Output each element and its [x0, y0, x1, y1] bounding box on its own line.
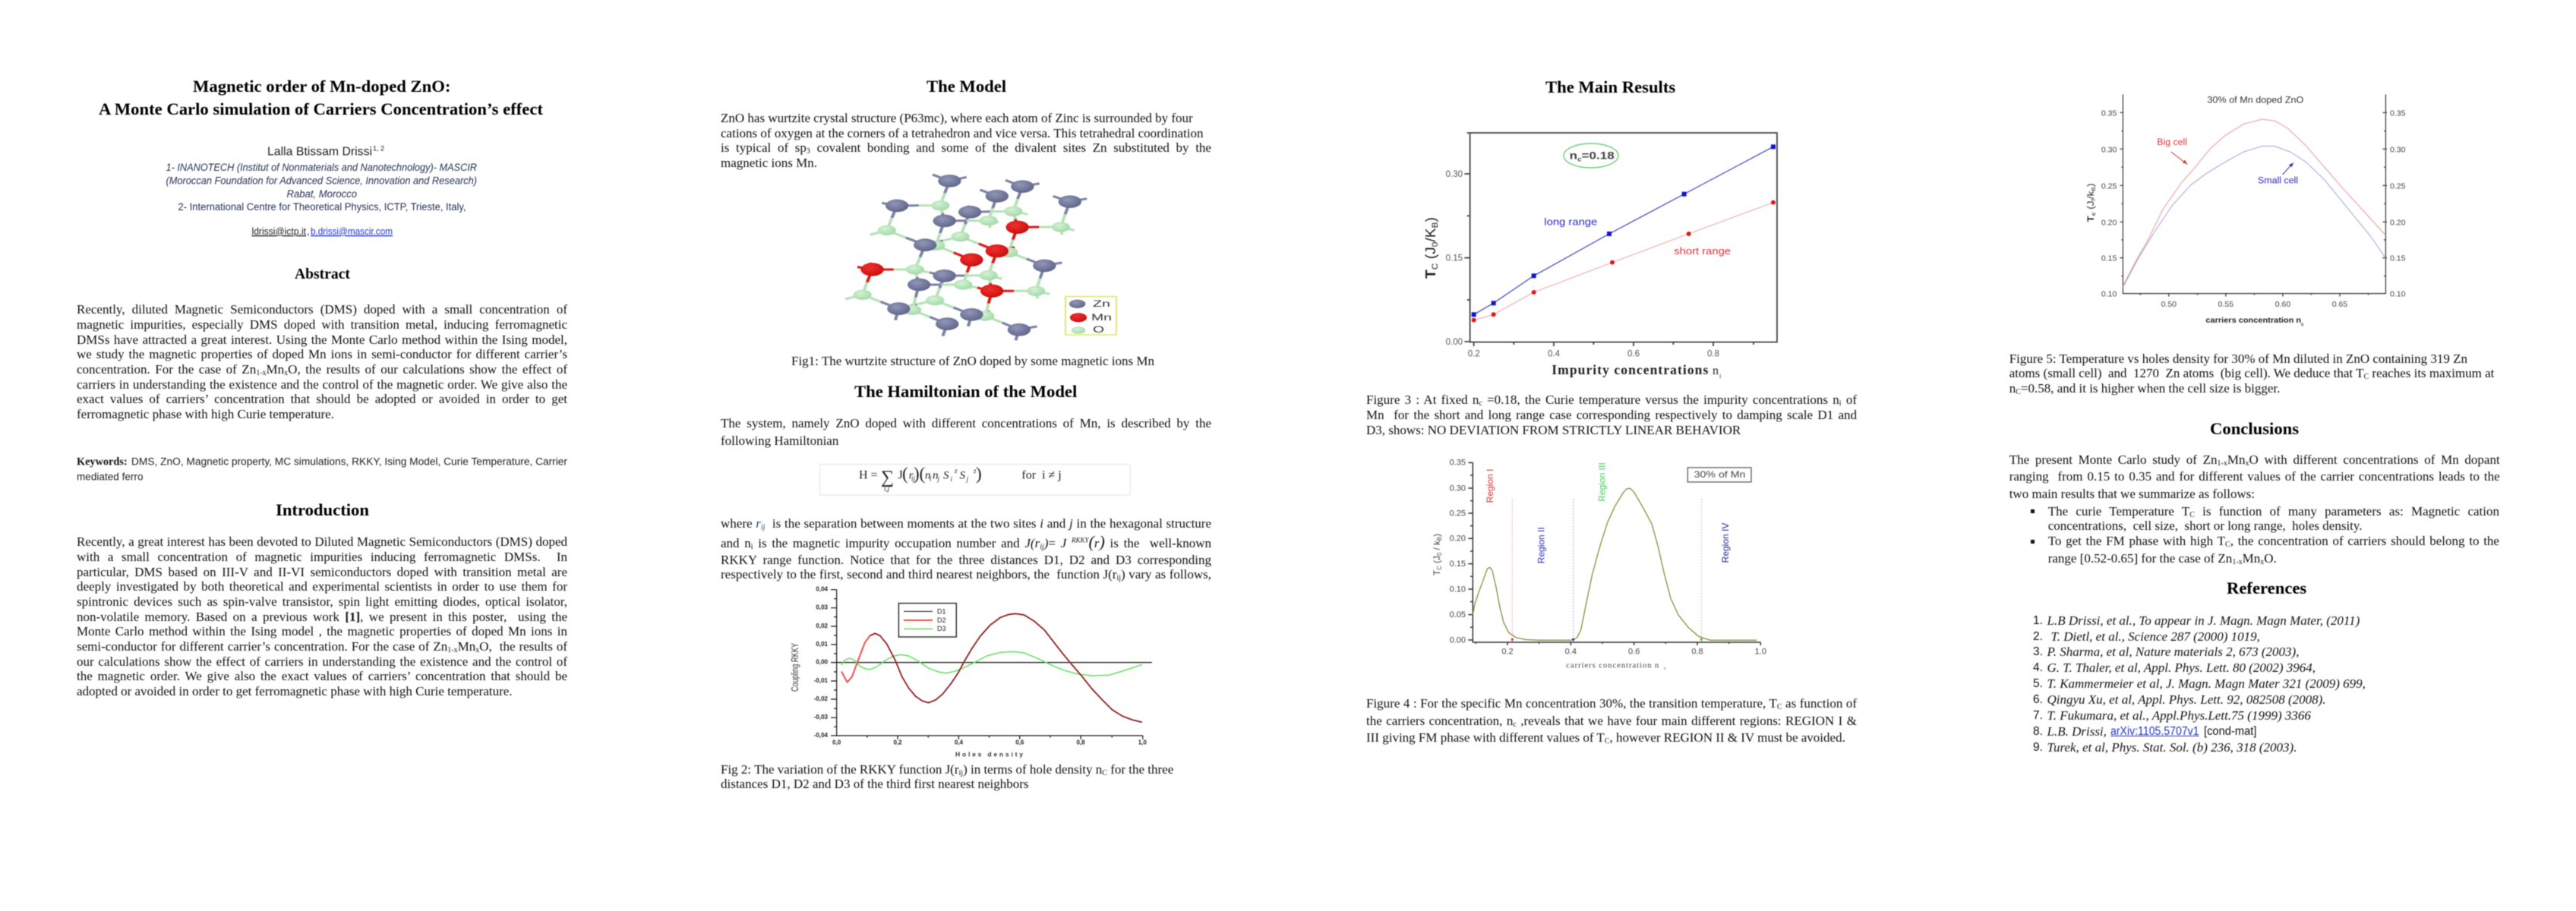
title — [99, 77, 544, 118]
text: introduction: particular, DMS based on III-V and II-VI semiconductors doped with transition metal are — [77, 565, 567, 579]
figure 1: wurtzite crystal structure: Mn — [1091, 314, 1112, 323]
figure 5: temperature vs holes density chart: Big cell — [2157, 138, 2187, 147]
figure 2: RKKY coupling chart: -0,04 — [814, 732, 829, 739]
text: abstract: Recently, diluted Magnetic Semiconductors (DMS) doped with a small concentration of — [77, 302, 567, 317]
authors and affiliations: 2- International Centre for Theoretical Physics, ICTP, Trieste, Italy, — [178, 201, 466, 213]
figure 3: Curie temperature vs impurity chart: n — [1713, 364, 1719, 377]
figure 3: Curie temperature vs impurity chart — [1423, 131, 1779, 380]
figure 5: temperature vs holes density chart: 0.25 — [2101, 181, 2117, 191]
figure 5: temperature vs holes density chart: B — [2091, 187, 2097, 191]
figure 4: Tc vs carrier concentration chart: carriers concentration n — [1566, 661, 1659, 670]
list: references: 1. — [2033, 614, 2043, 627]
list: references: T. Fukumara, et al., Appl.Phys.Lett.75 (1999) 3366 — [2047, 708, 2311, 723]
figure 4: Tc vs carrier concentration chart: 0.15 — [1450, 560, 1466, 569]
bullet list: conclusions — [2030, 504, 2500, 566]
figure 2: RKKY coupling chart: 0,04 — [816, 586, 829, 593]
authors and affiliations: Lalla Btissam Drissi — [267, 146, 372, 158]
caption: figure 3 — [1366, 392, 1858, 437]
figure 4: Tc vs carrier concentration chart: 0.30 — [1450, 484, 1466, 493]
figure 3: Curie temperature vs impurity chart: B — [1431, 222, 1440, 228]
text: the model — [720, 111, 1212, 170]
formula: hamiltonian: ) — [976, 465, 982, 484]
text: the model: ZnO has wurtzite crystal structure (P63mc), where each atom of Zinc is surrounded by four — [721, 111, 1193, 125]
caption: figure 5: Figure 5: Temperature vs holes density for 30% of Mn diluted in ZnO containing 319 Zn — [2009, 351, 2467, 366]
heading: abstract: Abstract — [295, 266, 350, 282]
figure 3: Curie temperature vs impurity chart: 0.15 — [1446, 254, 1463, 263]
list: references: 3. — [2033, 645, 2043, 658]
figure 4: Tc vs carrier concentration chart: 30% of Mn — [1694, 469, 1745, 480]
figure 2: RKKY coupling chart: 0,0 — [832, 739, 841, 746]
list: references — [2032, 613, 2366, 755]
figure 3: Curie temperature vs impurity chart: 0.2 — [1468, 349, 1480, 358]
caption: figure 5: atoms (small cell) and 1270 Zn atoms (big cell). We deduce that TC reaches its maximum at — [2009, 366, 2494, 381]
figure 4: Tc vs carrier concentration chart: (J — [1432, 556, 1442, 566]
caption: figure 5: nC=0.58, and it is higher when the cell size is bigger. — [2009, 381, 2280, 396]
series D2 and D1 — [841, 613, 1142, 722]
formula: hamiltonian: z — [973, 467, 977, 474]
caption: figure 3: D3, shows: NO DEVIATION FROM STRICTLY LINEAR BEHAVIOR — [1366, 423, 1741, 437]
series D3 — [841, 651, 1142, 676]
text: introduction: spintronic devices such as spin-valve transistor, spin light emitting diodes, optical isolator, — [77, 594, 567, 609]
formula: hamiltonian: J — [898, 469, 903, 482]
title: A Monte Carlo simulation of Carriers Concentration’s effect — [99, 99, 543, 118]
figure 5: temperature vs holes density chart: carriers concentration n — [2205, 316, 2301, 325]
figure 5: temperature vs holes density chart: T — [2087, 216, 2096, 222]
figure 3: Curie temperature vs impurity chart: 0.4 — [1548, 349, 1561, 358]
text: abstract: DMSs have attracted a great interest. Using the Monte Carlo method within the Ising model, — [77, 333, 567, 347]
formula: hamiltonian: j — [937, 475, 940, 483]
figure 3: Curie temperature vs impurity chart: =0.18 — [1582, 149, 1615, 161]
list: references: 8. — [2033, 725, 2043, 738]
figure 4: Tc vs carrier concentration chart: B — [1436, 537, 1443, 541]
list: references: P. Sharma, et al, Nature materials 2, 673 (2003), — [2047, 645, 2299, 659]
formula: hamiltonian: ) — [914, 465, 920, 484]
figure 4: Tc vs carrier concentration chart: T — [1432, 570, 1442, 575]
figure 2: RKKY coupling chart: D2 — [937, 616, 946, 624]
formula: hamiltonian: j — [966, 475, 969, 483]
caption: figure 1: Fig1: The wurtzite structure of ZnO doped by some magnetic ions Mn — [791, 354, 1154, 368]
figure 2: RKKY coupling chart: Holes density — [955, 751, 1023, 758]
figure 3: Curie temperature vs impurity chart: (J — [1423, 247, 1438, 263]
authors and affiliations: b.drissi@mascir.com — [311, 225, 393, 237]
figure 5: temperature vs holes density chart: 0.65 — [2332, 300, 2347, 309]
figure 4: Tc vs carrier concentration chart: 0.05 — [1450, 610, 1466, 619]
figure 5: temperature vs holes density chart: 0.50 — [2161, 300, 2177, 309]
figure 4: Tc vs carrier concentration chart: 0.25 — [1450, 509, 1466, 518]
figure 2: RKKY coupling chart: D1 — [937, 608, 946, 616]
list: references: G. T. Thaler, et al, Appl. Phys. Lett. 80 (2002) 3964, — [2047, 660, 2316, 675]
figure 3: Curie temperature vs impurity chart: C — [1431, 263, 1440, 270]
figure 4: Tc vs carrier concentration chart: 1.0 — [1755, 648, 1766, 657]
figure 5: temperature vs holes density chart: 30% of Mn doped ZnO — [2207, 96, 2303, 106]
formula: hamiltonian: S — [943, 470, 949, 482]
figure 5: temperature vs holes density chart: Small cell — [2258, 177, 2298, 186]
figure 4: Tc vs carrier concentration chart: 0 — [1436, 552, 1443, 556]
caption: figure 3: Figure 3 : At fixed nc =0.18, the Curie temperature versus the impurity concentrations ni of — [1366, 392, 1857, 408]
figure 5: temperature vs holes density chart: 0.20 — [2101, 218, 2117, 227]
figure 4: Tc vs carrier concentration chart: Region III — [1596, 462, 1607, 502]
text: introduction: Recently, a great interest has been devoted to Diluted Magnetic Semiconductors (DMS) doped — [77, 534, 567, 549]
list: references: L.B. Drissi, — [2047, 724, 2107, 739]
formula: hamiltonian: ∑ — [881, 468, 894, 487]
heading: references: References — [2227, 578, 2306, 597]
text: hamiltonian intro — [720, 416, 1212, 448]
figure 3: Curie temperature vs impurity chart: 0 — [1431, 242, 1440, 247]
keywords: mediated ferro — [77, 471, 143, 483]
figure 3: Curie temperature vs impurity chart: 0.8 — [1707, 349, 1719, 358]
figure 5: temperature vs holes density chart: 0.20 — [2390, 218, 2406, 227]
bullet 2: range [0.52-0.65] for the case of Zn1-xMnxO. — [2048, 551, 2277, 566]
list: references: [cond-mat] — [2204, 725, 2256, 738]
figure 4: Tc vs carrier concentration chart: Region I — [1485, 469, 1495, 503]
figure 1: wurtzite crystal structure: O — [1093, 326, 1104, 335]
authors and affiliations: ldrissi@ictp.it — [252, 225, 306, 237]
authors and affiliations: (Moroccan Foundation for Advanced Science, Innovation and Research) — [166, 175, 477, 187]
caption: figure 5 — [2009, 351, 2495, 396]
figure 4: Tc vs carrier concentration chart: 0.2 — [1501, 648, 1514, 657]
caption: figure 2 — [720, 762, 1174, 791]
text: introduction: the magnetic order. We give also the exact values of carriers’ concentration that should be — [77, 669, 567, 683]
figure 2: RKKY coupling chart: 0,02 — [816, 623, 829, 629]
figure 2: RKKY coupling chart: 0,2 — [893, 739, 902, 746]
text: abstract: carriers in understanding the existence and the control of the magnetic order. We give also the — [77, 377, 567, 392]
figure 3: Curie temperature vs impurity chart: 0.30 — [1446, 170, 1463, 179]
figure 5: temperature vs holes density chart: 0.55 — [2218, 300, 2233, 309]
text: abstract: we study the magnetic properties of doped Mn ions in semi-conductor for different carrier’s — [77, 347, 567, 361]
figure 2: RKKY coupling chart: 0,4 — [955, 739, 964, 746]
figure 5: temperature vs holes density chart: 0.30 — [2101, 145, 2117, 154]
text: abstract: ferromagnetic phase with high Curie temperature. — [77, 407, 334, 421]
formula: hamiltonian: ( — [919, 465, 925, 484]
figure 2: RKKY coupling chart: 0,6 — [1015, 739, 1024, 746]
figure 3: Curie temperature vs impurity chart: 0.6 — [1627, 349, 1640, 358]
figure 5: temperature vs holes density chart: ) — [2087, 183, 2096, 187]
text: hamiltonian intro: following Hamiltonian — [721, 433, 838, 448]
text: abstract — [76, 302, 568, 422]
text: conclusions: The present Monte Carlo study of Zn1-xMnxO with different concentrations of Mn dopant — [2009, 452, 2500, 468]
figure 4: Tc vs carrier concentration chart: Region IV — [1720, 523, 1731, 563]
chart axes — [831, 590, 1152, 739]
figure 4: Tc vs carrier concentration chart: C — [1436, 566, 1443, 570]
figure 5: temperature vs holes density chart: 0.25 — [2390, 181, 2406, 191]
formula: hamiltonian: H = — [859, 469, 878, 482]
list: references: 2. — [2033, 630, 2043, 643]
figure 2: RKKY coupling chart: Coupling RKKY — [789, 643, 800, 692]
list: references: 5. — [2033, 677, 2043, 690]
figure 3: Curie temperature vs impurity chart: /K — [1423, 228, 1438, 242]
text: conclusions: two main results that we summarize as follows: — [2009, 487, 2255, 501]
figure 3: Curie temperature vs impurity chart: T — [1423, 270, 1438, 279]
text: hamiltonian intro: The system, namely ZnO doped with different concentrations of Mn, is described by the — [721, 416, 1211, 430]
figure 2: RKKY coupling chart — [789, 586, 1153, 758]
figure 2: RKKY coupling chart: D3 — [937, 625, 946, 632]
text: conclusions — [2009, 452, 2500, 501]
text: the model: is typical of sp3 covalent bonding and some of the divalent sites Zn substituted by the — [721, 140, 1211, 156]
caption: figure 4: the carriers concentration, nc ,reveals that we have four main different regions: REGION I & — [1366, 714, 1857, 729]
figure 5: temperature vs holes density chart: f — [2091, 199, 2097, 200]
authors and affiliations: 1- INANOTECH (Institut of Nonmaterials and Nanotechnology)- MASCIR — [166, 162, 477, 173]
formula: hamiltonian: i — [951, 475, 952, 483]
list: references: 9. — [2033, 741, 2043, 754]
figure 5: temperature vs holes density chart: /k — [2087, 191, 2096, 199]
text: introduction: Monte Carlo method within the Ising model , the magnetic properties of doped Mn ions in — [77, 624, 567, 638]
figure 2: RKKY coupling chart: -0,02 — [814, 695, 829, 702]
figure 5: temperature vs holes density chart: 0.60 — [2275, 300, 2290, 309]
figure 4: Tc vs carrier concentration chart: 0.00 — [1450, 635, 1466, 645]
keywords — [76, 456, 568, 483]
bullet 1: concentrations, cell size, short or long range, holes density. — [2048, 519, 2363, 533]
heading: conclusions: Conclusions — [2210, 419, 2299, 438]
figure 2: RKKY coupling chart: 0,8 — [1076, 739, 1085, 746]
figure 3: Curie temperature vs impurity chart: short range — [1674, 245, 1731, 257]
figure 5: temperature vs holes density chart: 0.10 — [2101, 290, 2117, 299]
figure 3: Curie temperature vs impurity chart: 0.00 — [1446, 338, 1463, 347]
figure 2: RKKY coupling chart: -0,01 — [814, 677, 829, 684]
figure 5: temperature vs holes density chart: 0.35 — [2390, 109, 2406, 118]
figure 2: RKKY coupling chart: 0,00 — [816, 659, 829, 666]
authors and affiliations: Rabat, Morocco — [287, 188, 357, 200]
text: abstract: exact values of carriers’ concentration that should be adopted or avoided in order to get — [77, 392, 567, 406]
figure 5: temperature vs holes density chart: 0.15 — [2390, 254, 2406, 263]
text: abstract: magnetic impurities, especially DMS doped with transition metal, inducing ferromagnetic — [77, 317, 567, 332]
figure 3: Curie temperature vs impurity chart: ) — [1423, 217, 1438, 222]
text: introduction — [76, 534, 568, 698]
list: references: arXiv:1105.5707v1 — [2110, 725, 2199, 738]
figure 4: Tc vs carrier concentration chart: 0.6 — [1628, 648, 1640, 657]
bullet 2 — [2030, 534, 2500, 566]
figure 3: Curie temperature vs impurity chart: n — [1570, 149, 1576, 161]
figure 5: temperature vs holes density chart: 0.35 — [2101, 109, 2117, 118]
formula: hamiltonian: S — [960, 470, 966, 482]
authors and affiliations — [166, 144, 477, 237]
text: hamiltonian explanation: RKKY range function. Notice that for the three distances D1, D2 and D3 corresponding — [721, 553, 1211, 567]
figure 2: RKKY coupling chart: -0,03 — [814, 714, 829, 720]
text: hamiltonian explanation: respectively to the first, second and third nearest neighbors, the function J(rij) vary as follows, — [721, 567, 1211, 582]
figure 4: Tc vs carrier concentration chart: 0.4 — [1565, 648, 1577, 657]
bullet 1 — [2030, 504, 2500, 533]
formula: hamiltonian: z — [954, 467, 958, 474]
figure 4: Tc vs carrier concentration chart — [1432, 459, 1766, 671]
caption: figure 4 — [1365, 696, 1858, 746]
figure 4: Tc vs carrier concentration chart: 0.35 — [1450, 459, 1466, 468]
text: introduction: our calculations show the effect of carriers in understanding the existence and the control of — [77, 654, 567, 669]
formula: hamiltonian — [819, 464, 1131, 496]
figure 4: Tc vs carrier concentration chart: 0.8 — [1691, 648, 1703, 657]
caption: figure 2: distances D1, D2 and D3 of the third first nearest neighbors — [721, 777, 1029, 791]
figure 1: wurtzite crystal structure — [844, 173, 1118, 342]
list: references: Qingyu Xu, et al, Appl. Phys. Lett. 92, 082508 (2008). — [2047, 692, 2326, 707]
figure 2: RKKY coupling chart: 0,03 — [816, 604, 829, 611]
list: references: T. Dietl, et al., Science 287 (2000) 1019, — [2050, 629, 2260, 644]
list: references: L.B Drissi, et al., To appear in J. Magn. Magn Mater, (2011) — [2047, 613, 2360, 628]
title: Magnetic order of Mn-doped ZnO: — [193, 77, 450, 96]
text: abstract: concentration. For the case of Zn1-xMnxO, the results of our calculations show the effect of — [77, 362, 567, 377]
figure 4: Tc vs carrier concentration chart: Region II — [1536, 527, 1546, 563]
authors and affiliations: , — [307, 225, 310, 237]
text: introduction: adopted or avoided in order to get ferromagnetic phase with high Curie temperature. — [77, 684, 513, 698]
caption: figure 2: Fig 2: The variation of the RKKY function J(rij) in terms of hole density nC for the three — [721, 762, 1173, 777]
text: hamiltonian explanation: and ni is the magnetic impurity occupation number and J(rij)= J RKKY(r) is the well-known — [721, 532, 1211, 551]
bullet 2: To get the FM phase with high TC, the concentration of carriers should belong to the — [2048, 534, 2499, 549]
formula: hamiltonian: r — [909, 470, 914, 482]
caption: figure 3: Mn for the short and long range case corresponding respectively to damping scale D1 and — [1366, 408, 1857, 422]
list: references: Turek, et al, Phys. Stat. Sol. (b) 236, 318 (2003). — [2047, 740, 2297, 755]
authors and affiliations: 1, 2 — [373, 144, 384, 152]
heading: introduction: Introduction — [276, 500, 369, 519]
caption: figure 4: III giving FM phase with different values of TC, however REGION II & IV must be avoided. — [1366, 730, 1845, 746]
keywords: Keywords: — [77, 456, 128, 468]
heading: the main results: The Main Results — [1545, 77, 1675, 96]
bullet 1: The curie Temperature TC is function of many parameters as: Magnetic cation — [2048, 504, 2499, 519]
text: introduction: semi-conductor for different carrier’s concentration. For the case of Zn1-xMnxO, the results of — [77, 639, 567, 654]
figure 5: temperature vs holes density chart: c — [2091, 212, 2097, 216]
figure 5: temperature vs holes density chart: c — [2301, 323, 2304, 327]
figure 2: RKKY coupling chart: 0,01 — [816, 641, 829, 648]
figure 5: temperature vs holes density chart: (J — [2087, 200, 2096, 213]
list: references: 4. — [2033, 661, 2043, 674]
figure 3: Curie temperature vs impurity chart: i — [1719, 373, 1722, 380]
text: conclusions: ranging from 0.15 to 0.35 and for different values of the carrier concentrations leads to the — [2009, 469, 2500, 484]
figure 4: Tc vs carrier concentration chart: 0.10 — [1450, 585, 1466, 594]
figure 3: Curie temperature vs impurity chart: c — [1577, 156, 1582, 162]
figure 3: Curie temperature vs impurity chart: Impurity concentrations — [1552, 362, 1708, 377]
keywords: DMS, ZnO, Magnetic property, MC simulations, RKKY, Ising Model, Curie Temperature, Carrier — [131, 456, 568, 468]
text: introduction: deeply investigated by both theoretical and experimental scientists in order to use them for — [77, 579, 567, 594]
figure 2: RKKY coupling chart: 1,0 — [1138, 739, 1147, 746]
formula: hamiltonian: ( — [902, 465, 908, 484]
list: references: 6. — [2033, 693, 2043, 706]
text: introduction: non-volatile memory. Based on a previous work [1], we present in this poster, using the — [77, 610, 567, 624]
figure 5: temperature vs holes density chart: 0.15 — [2101, 254, 2117, 263]
formula: hamiltonian: for i ≠ j — [1021, 469, 1062, 482]
list: references: T. Kammermeier et al, J. Magn. Magn Mater 321 (2009) 699, — [2047, 676, 2366, 691]
figure 5: temperature vs holes density chart: 0.30 — [2390, 145, 2406, 154]
formula: hamiltonian: i — [930, 475, 932, 483]
figure 5: temperature vs holes density chart: 0.10 — [2390, 290, 2406, 299]
figure 4: Tc vs carrier concentration chart: ) — [1432, 534, 1442, 537]
text: hamiltonian explanation: where rij is the separation between moments at the two sites i and j in the hexagonal structure — [721, 516, 1211, 531]
figure 5: temperature vs holes density chart — [2086, 94, 2406, 327]
formula: hamiltonian: ij — [911, 475, 916, 483]
legend box — [898, 604, 956, 637]
text: hamiltonian explanation — [720, 516, 1212, 583]
text: introduction: with a small concentration of magnetic impurities inducing ferromagnetic DMSs. In — [77, 550, 567, 564]
text: the model: cations of oxygen at the corners of a tetrahedron and vice versa. This tetrahedral coordination — [721, 126, 1204, 140]
figure 4: Tc vs carrier concentration chart: / k — [1432, 540, 1442, 553]
figure 4: Tc vs carrier concentration chart: c — [1664, 667, 1666, 671]
figure 3: Curie temperature vs impurity chart: long range — [1544, 216, 1597, 228]
formula: hamiltonian: i,j — [884, 485, 890, 493]
list: references: 7. — [2033, 709, 2043, 722]
formula: hamiltonian: n — [933, 470, 939, 482]
heading: the model: The Model — [927, 77, 1006, 96]
heading: the hamiltonian of the model: The Hamiltonian of the Model — [854, 382, 1077, 401]
figure 1: wurtzite crystal structure: Zn — [1093, 300, 1110, 309]
caption: figure 4: Figure 4 : For the specific Mn concentration 30%, the transition temperature, TC as function of — [1366, 696, 1857, 711]
text: the model: magnetic ions Mn. — [721, 156, 817, 170]
figure 4: Tc vs carrier concentration chart: 0.20 — [1450, 534, 1466, 544]
formula: hamiltonian: n — [925, 470, 931, 482]
